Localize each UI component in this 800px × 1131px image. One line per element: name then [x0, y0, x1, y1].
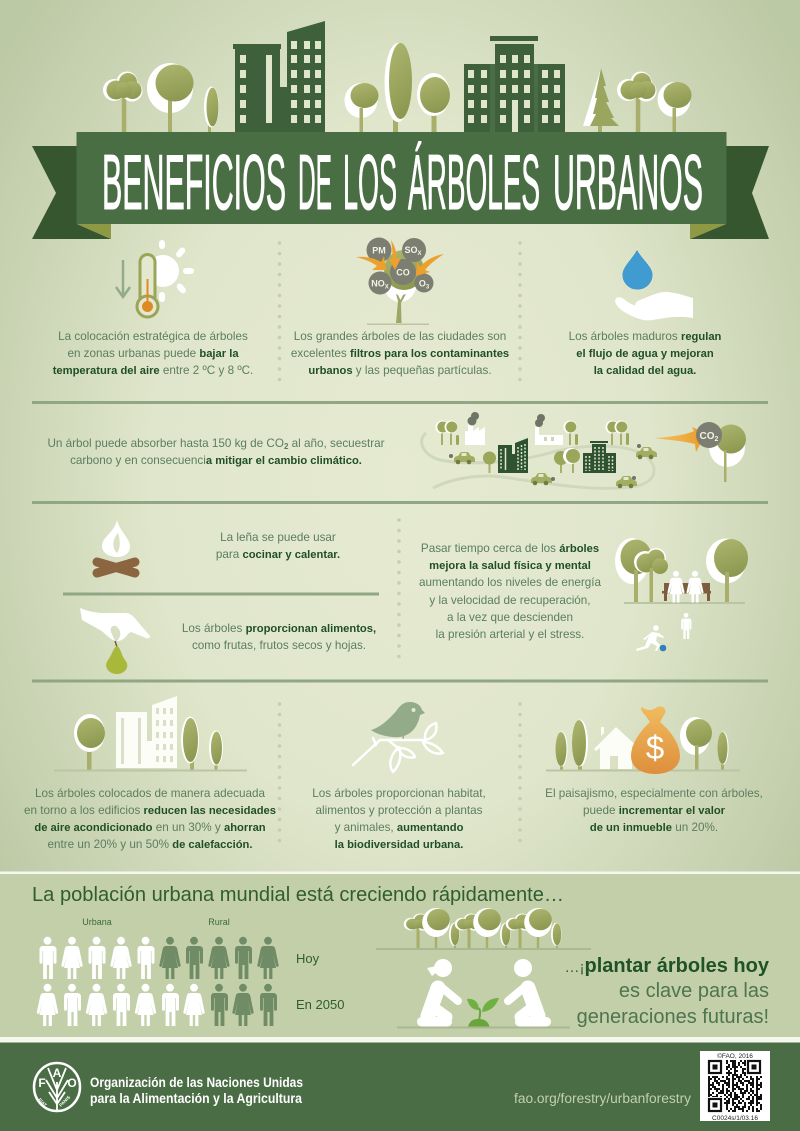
FAO logo: A — [53, 1066, 62, 1080]
mini building 1 — [498, 438, 528, 473]
text: climate change: Un árbol puede absorber hasta 150 kg de CO — [47, 437, 385, 451]
title: DE — [298, 138, 332, 226]
QR code — [700, 1051, 770, 1122]
tree: round 4 — [344, 83, 378, 132]
tree: pine 7 — [583, 68, 619, 132]
pictogram row: today — [40, 937, 279, 979]
banner folds — [77, 224, 726, 239]
label: En 2050: En 2050 — [296, 997, 344, 1012]
icon: water drop and hand — [615, 249, 693, 320]
icon: bird on branch — [353, 702, 443, 772]
text: firewood: para cocinar y calentar. — [216, 548, 340, 561]
text: biodiversity: alimentos y protección a plantas — [316, 804, 483, 817]
callout: plant trees today: …¡plantar árboles hoy — [564, 955, 770, 977]
park tree right — [706, 538, 748, 602]
text: pollutants: excelentes filtros para los contaminantes — [291, 347, 509, 360]
banner main — [76, 132, 726, 224]
panel: urban population — [0, 872, 800, 1042]
title: ÁRBOLES — [408, 138, 540, 226]
organisation name — [90, 1074, 303, 1106]
factory 2 — [535, 414, 563, 445]
text: food: Los árboles proporcionan alimentos, — [182, 622, 376, 635]
FAO logo — [34, 1063, 80, 1111]
icon: tree filtering pollutants: 3 — [426, 284, 430, 290]
QR code: C0024s/1/03.16 — [712, 1115, 758, 1122]
text: buildings: Los árboles colocados de manera adecuada — [35, 787, 266, 800]
park tree left — [615, 538, 652, 602]
illustration: people planting a sapling — [397, 959, 570, 1028]
panel: footer — [0, 1042, 800, 1131]
FAO logo: FIAT — [37, 1097, 48, 1108]
factory 1 — [465, 412, 485, 445]
title: BENEFICIOS — [102, 138, 286, 226]
tree: round 2 — [147, 63, 194, 132]
label: Urbana: Urbana — [82, 917, 112, 927]
text: buildings: entre un 20% y un 50% de calefacción. — [48, 838, 252, 851]
text: temperature: temperatura del aire entre 2 ºC y 8 ºC. — [53, 364, 253, 377]
divider lines — [280, 243, 520, 848]
ball — [660, 645, 666, 651]
text: water: Los árboles maduros regulan — [569, 330, 721, 343]
person right — [508, 959, 551, 1026]
tree: cloud 8 — [617, 72, 656, 132]
running person — [636, 625, 664, 651]
illustration: city with road, factories, cars — [422, 412, 657, 488]
illustration: park with bench and people — [615, 538, 748, 651]
cars — [449, 444, 657, 488]
text: climate change: carbono y en consecuencia mitigar el cambio climático. — [70, 454, 362, 467]
text: water: el flujo de agua y mejoran — [576, 348, 714, 360]
icon: tree filtering pollutants: X — [385, 284, 389, 290]
text: health: la presión arterial y el stress. — [436, 628, 584, 641]
pictogram row: 2050 — [37, 984, 277, 1026]
mini trees — [436, 420, 629, 473]
icon: thermometer and sun — [116, 240, 194, 317]
text: climate change: 2 — [284, 442, 289, 451]
building left — [233, 21, 325, 132]
icon: tree filtering pollutants: NO — [371, 278, 385, 288]
text: property value: de un inmueble un 20%. — [590, 821, 718, 834]
icon: tree absorbing CO2: 2 — [715, 436, 719, 443]
text: biodiversity: Los árboles proporcionan habitat, — [312, 787, 486, 800]
text: health: a la vez que descienden — [447, 611, 573, 624]
callout: plant trees today: generaciones futuras! — [577, 1006, 769, 1028]
text: biodiversity: la biodiversidad urbana. — [335, 839, 463, 851]
icon: tree filtering pollutants: X — [418, 251, 422, 257]
organisation name: Organización de las Naciones Unidas — [90, 1074, 303, 1090]
icon: tree filtering pollutants: PM — [372, 246, 386, 256]
icon: tree filtering pollutants — [356, 238, 444, 325]
text: firewood: La leña se puede usar — [220, 531, 336, 544]
text: climate change: al año, secuestrar — [288, 437, 385, 450]
text: health: mejora la salud física y mental — [429, 560, 591, 572]
text: pollutants: urbanos y las pequeñas partículas. — [308, 364, 492, 377]
callout: plant trees today — [564, 955, 770, 1028]
bench — [662, 583, 711, 601]
tree: cloud 1 — [103, 72, 142, 132]
FAO logo: PANIS — [58, 1095, 71, 1108]
sapling — [467, 998, 499, 1026]
building right — [464, 36, 565, 132]
text: health: y la velocidad de recuperación, — [429, 594, 591, 607]
text: buildings: en torno a los edificios reducen las necesidades — [24, 804, 276, 817]
illustration: trees around buildings — [54, 696, 247, 772]
banner ribbon — [32, 132, 769, 239]
tree: tall 5 — [384, 43, 412, 132]
organisation name: para la Alimentación y la Agricultura — [90, 1090, 302, 1106]
illustration: house, money bag and trees: $ — [646, 729, 664, 766]
illustration: house, money bag and trees — [546, 706, 740, 774]
label: Rural: Rural — [208, 917, 230, 927]
section rules — [32, 401, 768, 682]
text: water: la calidad del agua. — [594, 365, 696, 377]
skyline: trees and buildings — [103, 21, 692, 132]
label: Hoy: Hoy — [296, 951, 320, 966]
text: property value: puede incrementar el valor — [583, 804, 725, 817]
icon: firewood — [97, 520, 135, 573]
title: LOS — [343, 138, 397, 226]
text: buildings: de aire acondicionado en un 30% y ahorran — [34, 821, 266, 834]
tree row — [376, 908, 591, 950]
tree: round 9 — [658, 82, 692, 132]
text: health: aumentando los niveles de energía — [419, 576, 601, 589]
text: biodiversity: y animales, aumentando — [335, 821, 463, 834]
mini building 2 — [583, 441, 616, 473]
text: health: Pasar tiempo cerca de los árboles — [421, 542, 599, 555]
icon: tree absorbing CO2: CO — [700, 431, 715, 442]
QR code: ©FAO, 2016 — [717, 1052, 753, 1060]
text: property value: El paisajismo, especialmente con árboles, — [545, 787, 763, 800]
people on bench — [667, 571, 704, 602]
text: temperature: La colocación estratégica de árboles — [58, 330, 248, 343]
icon: tree filtering pollutants: CO — [396, 268, 410, 278]
FAO logo: F — [38, 1076, 46, 1090]
text: pollutants: Los grandes árboles de las ciudades son — [294, 330, 506, 343]
callout: plant trees today: es clave para las — [619, 980, 769, 1002]
tree: oval 6 — [417, 73, 450, 132]
standing person — [681, 613, 691, 639]
banner left tail — [32, 146, 111, 239]
icon: tree filtering pollutants: SO — [404, 245, 418, 255]
tree: narrow 3 — [204, 86, 219, 132]
icon: tree absorbing CO2 — [654, 422, 746, 482]
url: fao.org/forestry/urbanforestry — [514, 1091, 691, 1106]
icon: hand with pear — [80, 608, 150, 674]
banner right tail — [690, 146, 769, 239]
text: food: como frutas, frutos secos y hojas. — [192, 639, 366, 652]
person left — [417, 959, 458, 1026]
FAO logo: O — [67, 1076, 77, 1090]
heading: population: La población urbana mundial está creciendo rápidamente… — [32, 884, 564, 906]
text: temperature: en zonas urbanas puede bajar la — [67, 347, 239, 360]
icon: tree filtering pollutants: O — [419, 278, 426, 288]
park tree middle — [634, 548, 668, 602]
